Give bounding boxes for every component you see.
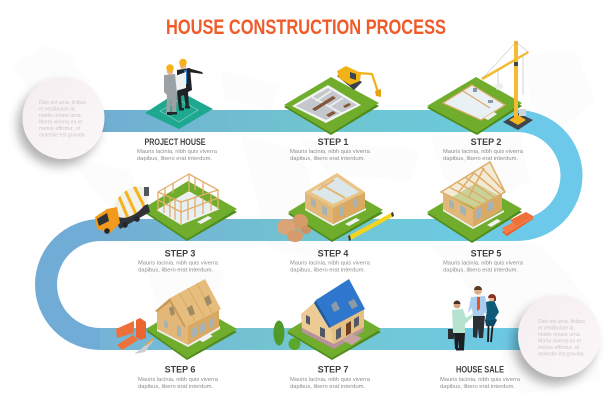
closing circle: molestie est gravida. [538, 352, 585, 358]
slab [443, 85, 505, 120]
label: step 2 [443, 137, 523, 162]
brick stack [502, 212, 533, 236]
intro circle: mattis ornare urna. [39, 113, 82, 119]
step 5 scene [427, 162, 533, 243]
label: house sale: HOUSE SALE [456, 364, 504, 374]
cement mixer truck [95, 186, 150, 234]
intro circle: et vestibulum at, [39, 106, 76, 112]
engineers [164, 59, 203, 115]
closing circle: mattis ornare urna. [538, 332, 581, 338]
label: step 4: Mauris lacinia, nibh quis viverra [290, 260, 370, 266]
title: HOUSE CONSTRUCTION PROCESS [166, 15, 446, 39]
step 4 scene [277, 173, 394, 242]
step 7 scene [274, 279, 381, 360]
label: project house: PROJECT HOUSE [144, 137, 206, 147]
label: step 3: STEP 3 [165, 248, 195, 258]
closing circle: metus efficitur, ut [538, 345, 580, 351]
step 6 scene [116, 279, 237, 360]
label: house sale [440, 364, 520, 390]
label: step 7: STEP 7 [318, 364, 348, 374]
wood frame [158, 174, 218, 224]
closing circle: Duis est urna, finibus [538, 319, 585, 325]
intro circle: molestie est gravida. [39, 132, 86, 138]
label: step 7: Mauris lacinia, nibh quis viverra [290, 377, 370, 383]
bricks and trowel [116, 318, 154, 354]
blueprint platform [145, 91, 213, 129]
label: step 4: STEP 4 [318, 248, 348, 258]
label: step 6: Mauris lacinia, nibh quis viverra [138, 377, 218, 383]
sand piles [277, 214, 311, 242]
intro circle: Duis est urna, finibus [39, 100, 86, 106]
wooden walls [305, 173, 366, 226]
closing circle [518, 295, 600, 377]
foundation [292, 85, 361, 123]
label: house sale: Mauris lacinia, nibh quis viverra [440, 377, 520, 383]
label: step 5: dapibus, libero erat interdum. [443, 268, 518, 274]
green plot [284, 77, 379, 135]
step 1 scene [284, 66, 381, 135]
label: step 2: dapibus, libero erat interdum. [443, 156, 518, 162]
label: step 5 [443, 248, 523, 274]
green plot [288, 183, 383, 242]
label: step 1: dapibus, libero erat interdum. [290, 156, 365, 162]
businesspeople handshake [448, 286, 499, 350]
green plot [142, 181, 237, 241]
project house scene [145, 59, 213, 129]
label: house sale: dapibus, libero erat interdum. [440, 384, 515, 390]
step 3 scene [142, 174, 237, 241]
label: project house: dapibus, libero erat interdum. [137, 156, 212, 162]
green plot [287, 302, 381, 360]
label: step 2: Mauris lacinia, nibh quis viverra [443, 149, 523, 155]
cypress and bush [274, 320, 300, 350]
label: step 1 [290, 137, 370, 162]
label: step 2: STEP 2 [471, 137, 501, 147]
label: step 3 [138, 248, 218, 274]
wood house [155, 279, 221, 347]
closing circle: Morbi viverra ex et [538, 338, 582, 344]
label: project house [137, 137, 217, 162]
label: step 4: dapibus, libero erat interdum. [290, 268, 365, 274]
label: step 4 [290, 248, 370, 274]
label: step 7: dapibus, libero erat interdum. [290, 384, 365, 390]
roof trusses house [441, 162, 505, 229]
label: step 1: Mauris lacinia, nibh quis viverra [290, 149, 370, 155]
label: step 6: dapibus, libero erat interdum. [138, 384, 213, 390]
green plot [427, 183, 522, 243]
label: step 3: dapibus, libero erat interdum. [138, 268, 213, 274]
excavator [337, 66, 381, 97]
spirit level [348, 212, 394, 241]
label: step 1: STEP 1 [318, 137, 348, 147]
label: step 7 [290, 364, 370, 390]
label: step 6 [138, 364, 218, 390]
label: step 6: STEP 6 [165, 364, 195, 374]
label: project house: Mauris lacinia, nibh quis viverra [137, 149, 217, 155]
winding road [46, 121, 571, 339]
label: step 3: Mauris lacinia, nibh quis viverra [138, 260, 218, 266]
intro circle: metus efficitur, ut [39, 126, 81, 132]
green plot [427, 77, 522, 135]
crane [481, 41, 533, 130]
closing circle: et vestibulum at, [538, 326, 575, 332]
finished house [301, 279, 365, 349]
intro circle: Morbi viverra ex et [39, 120, 83, 126]
step 2 scene [427, 41, 533, 135]
intro circle [22, 77, 104, 159]
label: step 5: Mauris lacinia, nibh quis viverra [443, 260, 523, 266]
label: step 5: STEP 5 [471, 248, 501, 258]
green plot [146, 302, 237, 360]
